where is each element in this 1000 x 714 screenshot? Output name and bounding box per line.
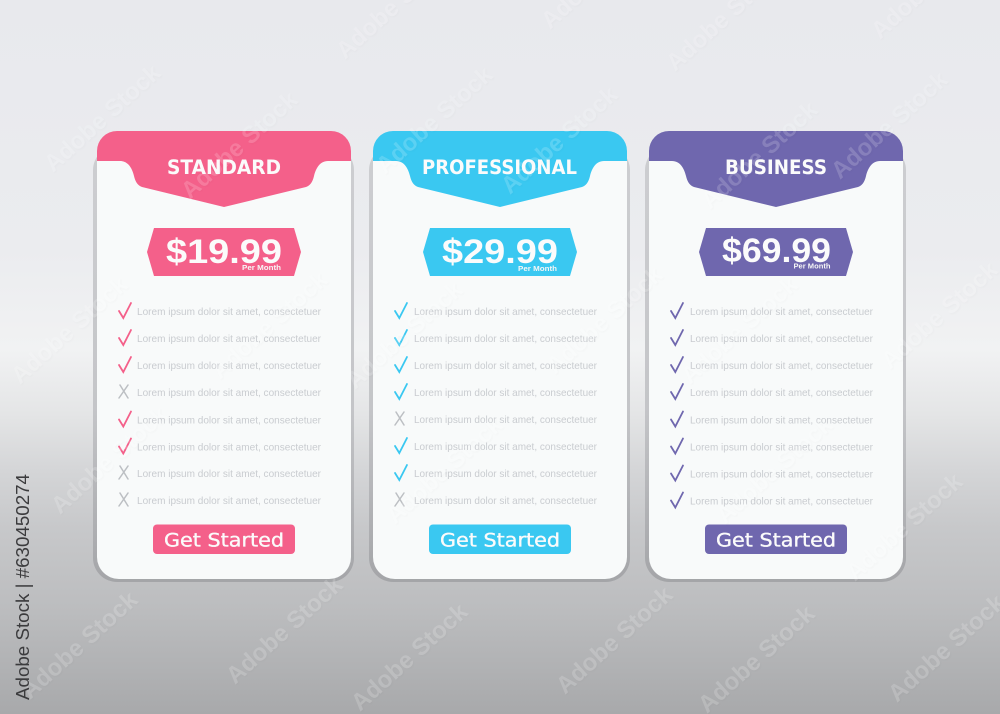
watermarks: Adobe Stock [206,266,334,384]
watermarks: Adobe Stock [676,271,804,389]
watermarks: Adobe Stock [341,276,469,394]
card: professional shadow [369,146,630,582]
feature list: professional [395,303,597,507]
feature list: business: Lorem ipsum dolor sit amet, consectetuer [690,442,873,454]
watermarks: Adobe Stock [551,581,679,699]
feature list: business: Lorem ipsum dolor sit amet, consectetuer [690,333,873,345]
feature list: professional: Lorem ipsum dolor sit amet, consectetuer [414,414,597,426]
watermarks: Adobe Stock [381,411,509,529]
heading: business: BUSINESS [725,156,827,179]
price badge: business [699,228,853,276]
price badge: standard [147,228,301,276]
feature list: standard: Lorem ipsum dolor sit amet, consectetuer [137,495,321,507]
feature list: standard: Lorem ipsum dolor sit amet, consectetuer [137,414,321,426]
feature list: professional: Lorem ipsum dolor sit amet, consectetuer [414,441,597,453]
feature list: professional: Lorem ipsum dolor sit amet, consectetuer [414,468,597,480]
watermarks: Adobe Stock [39,59,167,177]
header: business ribbon [649,131,903,207]
feature list: standard: Lorem ipsum dolor sit amet, consectetuer [137,306,321,318]
feature list: business: Lorem ipsum dolor sit amet, consectetuer [690,414,873,426]
watermarks: Adobe Stock [176,86,304,204]
feature list: business [671,303,873,508]
price badge: standard: Per Month [242,263,281,272]
card: business body [649,131,903,579]
watermarks: Adobe Stock [826,66,954,184]
feature list: business: Lorem ipsum dolor sit amet, consectetuer [690,360,873,372]
watermarks: Adobe Stock [6,271,134,389]
feature list: standard [119,303,321,507]
button: standard: Get Started [164,530,284,552]
panel: standard plan [93,131,354,582]
button: standard [153,524,295,554]
header: standard ribbon [97,131,351,207]
feature list: standard: Lorem ipsum dolor sit amet, consectetuer [137,333,321,345]
heading: professional: PROFESSIONAL [422,156,577,179]
price badge: business: $69.99 [722,232,831,270]
button: professional: Get Started [440,530,560,552]
price badge: professional [423,228,577,276]
feature list: business: Lorem ipsum dolor sit amet, consectetuer [690,496,873,508]
watermarks: Adobe Stock [711,411,839,529]
watermarks: Adobe Stock [16,586,144,704]
feature list: standard: Lorem ipsum dolor sit amet, consectetuer [137,442,321,454]
feature list: business: Lorem ipsum dolor sit amet, consectetuer [690,306,873,318]
feature list: standard: Lorem ipsum dolor sit amet, consectetuer [137,468,321,480]
price badge: professional: Per Month [518,264,557,273]
price badge: standard: $19.99 [166,233,282,271]
feature list: professional: Lorem ipsum dolor sit amet, consectetuer [414,360,597,372]
card: professional body [373,131,627,579]
button: business [705,524,847,554]
panel: professional plan [369,131,630,582]
watermarks: Adobe Stock [876,256,1000,374]
feature list: business: Lorem ipsum dolor sit amet, consectetuer [690,468,873,480]
button: business: Get Started [716,530,836,552]
watermarks: Adobe Stock [541,261,669,379]
watermarks: Adobe Stock [371,61,499,179]
feature list: professional: Lorem ipsum dolor sit amet, consectetuer [414,387,597,399]
header: professional ribbon [373,131,627,207]
price badge: business: Per Month [794,262,831,270]
watermarks: Adobe Stock [346,598,474,714]
card: business shadow [645,146,906,582]
feature list: professional: Lorem ipsum dolor sit amet, consectetuer [414,333,597,345]
watermarks: Adobe Stock [496,81,624,199]
panel: business plan [645,131,906,582]
feature list: standard: Lorem ipsum dolor sit amet, consectetuer [137,360,321,372]
stock credit: Adobe Stock | #630450274 [13,474,33,700]
watermarks: Adobe Stock [46,401,174,519]
feature list: professional: Lorem ipsum dolor sit amet, consectetuer [414,495,597,507]
heading: standard: STANDARD [167,156,281,179]
price badge: professional: $29.99 [442,233,558,271]
feature list: professional: Lorem ipsum dolor sit amet, consectetuer [414,306,597,318]
feature list: business: Lorem ipsum dolor sit amet, consectetuer [690,387,873,399]
watermarks: Adobe Stock [841,468,969,586]
card: standard shadow [93,146,354,582]
button: professional [429,524,571,554]
watermarks: Adobe Stock [221,571,349,689]
card: standard body [97,131,351,579]
feature list: standard: Lorem ipsum dolor sit amet, consectetuer [137,387,321,399]
watermarks: Adobe Stock [696,96,824,214]
